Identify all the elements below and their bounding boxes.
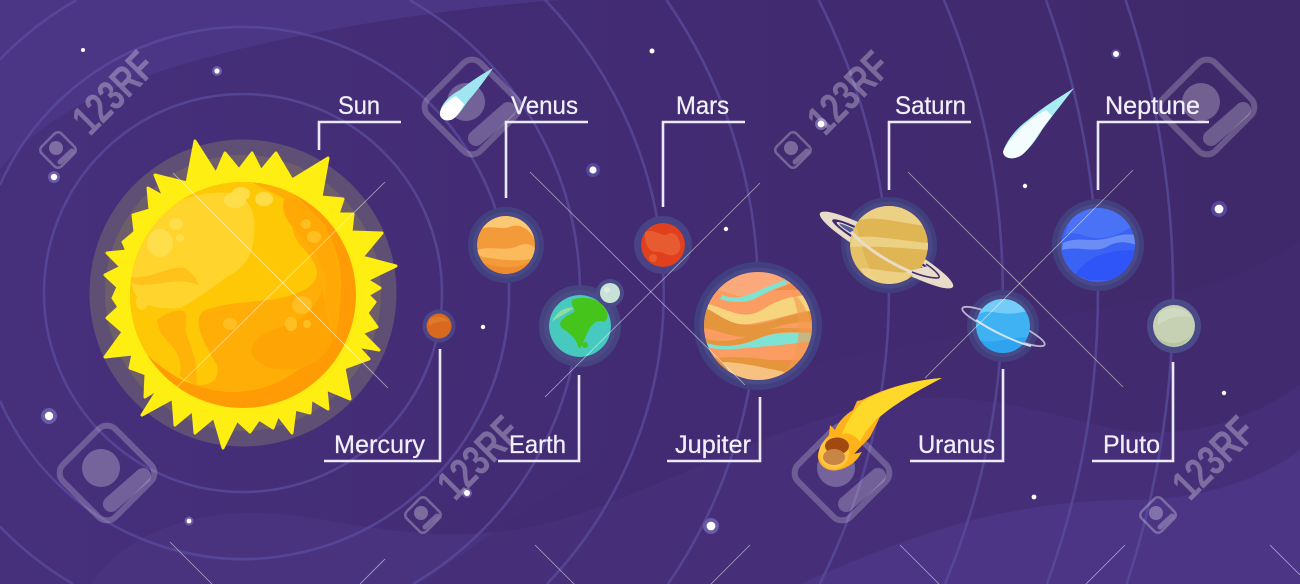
- planet: Mercury: [422, 310, 456, 342]
- label: Earth: [498, 375, 579, 461]
- planet: Neptune: [1052, 199, 1144, 291]
- label: Pluto: Pluto: [1103, 431, 1160, 459]
- label: Sun: [319, 92, 401, 150]
- sun: [90, 140, 396, 448]
- planet: Jupiter: [694, 262, 822, 390]
- label: Neptune: Neptune: [1105, 92, 1200, 120]
- watermark text: 123RF: [63, 42, 165, 144]
- planet: Earth: [539, 279, 624, 367]
- label: Mercury: [324, 349, 440, 461]
- planet: Mars: [634, 216, 692, 274]
- moon: [596, 279, 624, 307]
- watermark logo large: [55, 55, 1259, 525]
- label: Sun: Sun: [338, 92, 380, 120]
- watermark text: 123RF: [1163, 407, 1265, 509]
- planet: Venus: [468, 207, 544, 283]
- label: Mars: Mars: [676, 92, 729, 120]
- label: Neptune: [1098, 92, 1209, 190]
- watermark text: 123RF: [798, 42, 900, 144]
- planet: Saturn: [820, 197, 954, 293]
- Saturn ring front: [851, 232, 931, 279]
- label: Uranus: Uranus: [918, 431, 995, 459]
- watermark: [38, 42, 1265, 535]
- sun flames: [105, 141, 396, 448]
- label: Venus: Venus: [511, 92, 578, 120]
- label: Pluto: [1092, 362, 1173, 461]
- watermark text: 123RF: [428, 407, 530, 509]
- watermark text: [63, 42, 1265, 509]
- label: Jupiter: [667, 397, 760, 461]
- planet: Pluto: [1147, 299, 1201, 353]
- label: Jupiter: Jupiter: [675, 431, 751, 459]
- label: Saturn: [889, 92, 971, 190]
- planet: Uranus: [959, 290, 1048, 362]
- label: Mars: [663, 92, 745, 207]
- comet: fire: [818, 378, 942, 470]
- label: Uranus: [910, 369, 1003, 461]
- label: Earth: Earth: [509, 431, 566, 459]
- sun halo: [90, 140, 396, 446]
- comet: white left: [440, 68, 493, 120]
- comet: white right: [1003, 88, 1074, 158]
- stars: [41, 48, 1227, 534]
- label: Venus: [506, 92, 588, 198]
- sun disc: [120, 176, 356, 408]
- label: Mercury: Mercury: [334, 431, 425, 459]
- label: Saturn: Saturn: [895, 92, 966, 120]
- Saturn rings back: [814, 202, 959, 298]
- watermark logo small: [38, 130, 1178, 535]
